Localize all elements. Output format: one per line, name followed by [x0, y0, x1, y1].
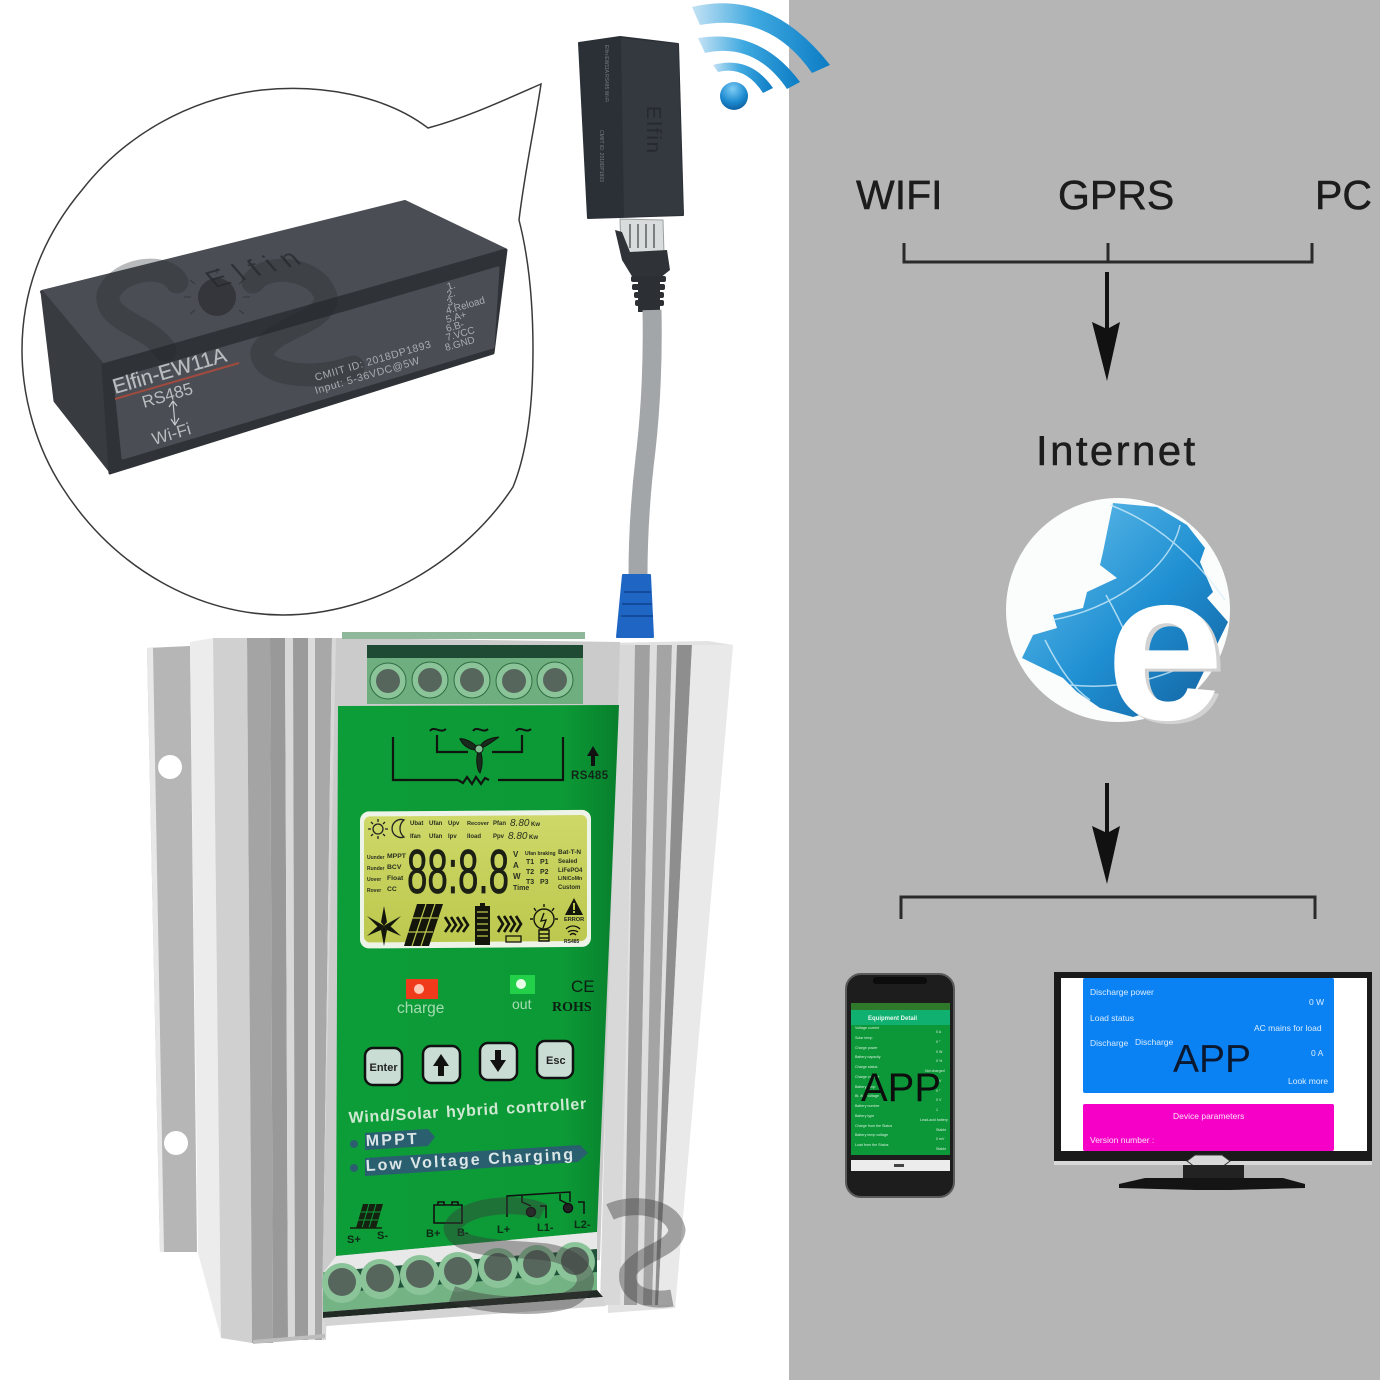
LCD main digits: 88:8.8	[407, 838, 509, 907]
body base edge	[253, 1334, 325, 1344]
terminal base shadow	[323, 1290, 603, 1318]
blue connector	[617, 575, 653, 637]
dongle logo: Elfin	[642, 106, 664, 155]
button down	[480, 1043, 517, 1080]
phone notch	[873, 977, 927, 984]
blue card text: Discharge	[1090, 1038, 1129, 1048]
LCD top labels: Ifan	[410, 834, 421, 840]
LCD top labels: Ufan	[429, 834, 443, 840]
PC label: PC	[1315, 172, 1372, 218]
MPPT tag	[350, 1129, 435, 1150]
Low Voltage Charging tag: Low Voltage Charging	[365, 1146, 576, 1175]
LCD units: W	[513, 872, 521, 881]
LCD wifi icon	[566, 926, 580, 935]
L plus: L+	[497, 1224, 510, 1236]
LCD mode labels: LiFePO4	[558, 868, 583, 874]
B minus: B-	[457, 1227, 469, 1239]
monitor screen	[1061, 978, 1367, 1151]
charge chevrons	[445, 917, 468, 932]
letter e shadow: e	[1110, 530, 1228, 767]
monitor neck	[1183, 1165, 1244, 1178]
module left face	[42, 292, 110, 471]
gray cable	[638, 310, 652, 576]
LCD top labels: Kw	[529, 835, 538, 841]
phone rows: 0 V	[936, 1098, 942, 1102]
LCD top labels: Kw	[531, 822, 540, 828]
LCD left labels: Uunder	[367, 855, 385, 861]
bottom white strip	[323, 1232, 597, 1273]
L1 minus: L1-	[537, 1222, 554, 1234]
B plus: B+	[426, 1228, 440, 1240]
LCD mode labels: T3	[526, 879, 534, 886]
phone rows: 0 V	[936, 1079, 942, 1083]
wiring diagram	[393, 729, 563, 784]
pin list: 6.B-	[445, 319, 465, 335]
terminal lower lip	[323, 1297, 606, 1326]
cable boot	[615, 230, 670, 278]
Elfin-EW11A module	[42, 202, 506, 473]
LCD mode labels: Bat-T-N	[558, 849, 581, 856]
phone rows: Charge voltage	[855, 1075, 879, 1079]
dongle label: Elfin-EW11A RS485 Wi-Fi	[603, 45, 609, 102]
phone	[846, 974, 954, 1197]
LCD mode labels: Custom	[558, 885, 580, 891]
top bracket	[904, 243, 1312, 262]
left channel 2	[293, 638, 308, 1340]
AC wave marks	[430, 729, 531, 731]
double arrow	[169, 401, 179, 425]
LCD RS485 label: RS485	[564, 939, 580, 945]
phone rows: Battery number	[855, 1104, 880, 1108]
phone rows: Lead-acid battery	[920, 1118, 948, 1122]
blue card	[1083, 978, 1334, 1093]
LCD top labels: Recover	[467, 821, 490, 827]
LCD left labels: Rover	[367, 888, 381, 894]
LCD units: V	[513, 850, 519, 859]
right channel 1	[624, 645, 650, 1305]
button Esc	[537, 1041, 573, 1078]
phone rows: 0 °	[936, 1040, 941, 1044]
right panel background	[789, 0, 1380, 1380]
warning icon	[565, 898, 583, 915]
CMIIT ID: CMIIT ID: 2018DP1893	[313, 338, 433, 384]
charge label: charge	[397, 1000, 444, 1017]
phone screen	[851, 1010, 950, 1155]
phone rows: Battery type	[855, 1114, 874, 1118]
LCD mode labels: LiNiCoMn	[558, 876, 582, 882]
phone rows: 1	[936, 1108, 938, 1112]
button up	[423, 1046, 460, 1083]
phone rows: Charge from the Status	[855, 1124, 892, 1128]
sun icon	[368, 819, 388, 839]
wind icon	[367, 906, 401, 946]
pin list: 5.A+	[445, 310, 468, 326]
top terminal block	[367, 645, 583, 704]
watermark on controller	[452, 1206, 677, 1305]
monitor chin line	[1054, 1161, 1372, 1165]
pin list: 8.GND	[444, 335, 476, 354]
LCD mode labels: Ufan braking	[525, 851, 556, 857]
RJ45 plug	[620, 219, 664, 254]
LCD mode labels: P1	[540, 859, 549, 866]
embossed logo: Elfin	[199, 242, 315, 293]
arrow to internet	[1092, 272, 1120, 381]
right rib 3	[652, 645, 677, 1305]
phone bottom bar	[851, 1160, 950, 1171]
phone rows: Load from the Status	[855, 1143, 889, 1147]
LCD mode labels	[525, 849, 583, 891]
button Esc: Esc	[546, 1055, 566, 1067]
right body plate	[600, 641, 733, 1313]
left rib 1	[285, 638, 295, 1340]
LCD left labels: BCV	[387, 864, 402, 871]
S minus: S-	[377, 1230, 388, 1242]
ROHS mark: ROHS	[552, 1000, 592, 1015]
left mounting flange	[147, 646, 197, 1252]
pin list: 2.	[446, 288, 457, 301]
arrow to apps	[1092, 783, 1120, 884]
phone rows: Stable	[936, 1147, 946, 1151]
LCD top labels: Iload	[467, 834, 481, 840]
LCD units: Time	[513, 885, 529, 892]
body white edge	[190, 638, 221, 1338]
LCD mode labels: T1	[526, 859, 534, 866]
RS485 label: RS485	[571, 770, 609, 782]
phone status bar	[851, 1003, 950, 1010]
wind turbine icon	[460, 737, 499, 773]
button Enter: Enter	[370, 1062, 398, 1074]
bottom terminal block	[322, 1242, 606, 1326]
monitor center logo	[1187, 1155, 1230, 1167]
blue connector ribs	[621, 592, 653, 616]
dongle body	[579, 37, 683, 218]
phone rows: Battery temp	[855, 1085, 875, 1089]
phone rows: 0 °	[936, 1089, 941, 1093]
red underline	[115, 363, 239, 399]
RS485 arrow	[587, 746, 599, 766]
LCD mode labels: P2	[540, 869, 549, 876]
speech bubble	[22, 84, 541, 615]
LCD left labels: MPPT	[387, 853, 407, 860]
out label: out	[512, 996, 532, 1012]
pin list	[444, 280, 486, 354]
LCD top labels: 8.80	[510, 818, 530, 829]
RJ45 contacts	[630, 224, 654, 248]
module top face	[42, 202, 505, 363]
solar panel icon	[404, 904, 443, 946]
phone rows: Battery temp voltage	[855, 1133, 888, 1137]
LCD top labels: Ppv	[493, 834, 505, 840]
LCD mode labels: P3	[540, 879, 549, 886]
left rib 3	[322, 638, 338, 1340]
controller title: Wind/Solar hybrid controller	[348, 1096, 587, 1127]
left channel 3	[315, 638, 332, 1340]
magenta card	[1083, 1104, 1334, 1151]
WIFI label: WIFI	[856, 172, 943, 218]
WiFi dongle	[579, 37, 683, 637]
input rating: Input: 5-36VDC@5W	[313, 355, 421, 397]
phone rows: Voltage current	[855, 1026, 879, 1030]
magenta card title: Device parameters	[1173, 1111, 1244, 1121]
charge LED	[406, 979, 438, 999]
button Enter	[365, 1048, 402, 1085]
phone rows: 0 mV	[936, 1137, 945, 1141]
left background	[0, 0, 789, 1380]
S plus: S+	[347, 1234, 361, 1246]
battery terminal icon	[434, 1202, 462, 1223]
phone rows: Stable	[936, 1128, 946, 1132]
dongle right face	[621, 38, 683, 217]
monitor APP label: APP	[1173, 1038, 1251, 1081]
LCD top labels: Ufan	[429, 821, 443, 827]
pin list: 4.Reload	[445, 295, 486, 317]
letter e: e	[1106, 527, 1224, 764]
LCD display	[360, 810, 591, 948]
load wiring icon	[507, 1192, 584, 1218]
MPPT tag: MPPT	[365, 1131, 419, 1150]
LCD units: A	[513, 861, 519, 870]
pin list: 1.	[446, 280, 457, 293]
LCD left labels: Float	[387, 875, 404, 882]
phone body	[846, 974, 954, 1197]
phone rows: 0 A	[936, 1030, 942, 1034]
dongle label 2: CMIIT ID: 2018DP1893	[598, 130, 604, 182]
left rib 2	[308, 638, 315, 1340]
Internet label: Internet	[1036, 427, 1198, 474]
icon: wifi signal	[692, 3, 830, 110]
LCD top labels: Upv	[448, 821, 460, 827]
top terminal strip	[342, 632, 585, 639]
phone bottom bar dots	[894, 1164, 904, 1167]
LCD left labels: Runder	[367, 866, 385, 872]
blue card text: Discharge	[1135, 1037, 1174, 1047]
watermark sun	[184, 268, 250, 316]
flange hole bottom	[164, 1131, 188, 1155]
model name: Elfin-EW11A	[110, 344, 229, 399]
monitor frame	[1054, 972, 1372, 1165]
phone rows	[855, 1026, 948, 1151]
blue card text: Load status	[1090, 1013, 1134, 1023]
flange light edge	[147, 648, 164, 1252]
bottom bracket	[901, 897, 1315, 919]
GPRS label: GPRS	[1058, 172, 1174, 218]
phone APP label: APP	[861, 1066, 941, 1110]
pin list: 3.	[446, 296, 457, 309]
solar terminal icon	[350, 1204, 383, 1228]
LCD top labels: 8.80	[508, 831, 528, 842]
L2 minus: L2-	[574, 1219, 591, 1231]
LCD mode labels: T2	[526, 869, 534, 876]
monitor	[1054, 972, 1372, 1190]
LCD mode labels: Sealed	[558, 859, 578, 865]
out LED	[510, 975, 535, 994]
hybrid controller	[147, 632, 733, 1344]
LCD units	[513, 850, 529, 892]
watermark on module	[108, 270, 353, 375]
phone header	[851, 1010, 950, 1025]
blue card text	[1090, 987, 1328, 1086]
blue card text: AC mains for load	[1254, 1023, 1322, 1033]
right rib 1	[600, 645, 635, 1305]
LCD top labels	[410, 818, 540, 842]
LCD top labels: Ubat	[410, 821, 423, 827]
LCD top labels: Ipv	[448, 834, 457, 840]
resistor icon	[506, 936, 521, 942]
phone header title: Equipment Detail	[868, 1016, 917, 1022]
battery icon	[475, 903, 490, 945]
icon: internet globe	[1006, 498, 1230, 767]
ERROR label: ERROR	[564, 917, 584, 923]
right band	[658, 645, 733, 1305]
magenta card version: Version number :	[1090, 1135, 1154, 1145]
center silver plate	[322, 638, 620, 1296]
monitor base	[1119, 1178, 1305, 1190]
left body band 2	[247, 638, 273, 1343]
RS485 label: RS485	[140, 379, 195, 412]
phone rows: Charge status	[855, 1065, 878, 1069]
LCD top labels: Pfan	[493, 821, 506, 827]
flange hole top	[158, 755, 182, 779]
blue card text: Discharge power	[1090, 987, 1154, 997]
phone rows: Battery capacity	[855, 1055, 881, 1059]
module front face	[103, 250, 506, 473]
phone rows: Solar temp	[855, 1036, 872, 1040]
globe ocean	[1022, 503, 1228, 717]
green front panel	[336, 705, 619, 1256]
left body band 1	[213, 638, 252, 1343]
phone rows: Not charged	[925, 1069, 945, 1073]
phone rows: Bt. Avg voltage	[855, 1094, 879, 1098]
phone rows: 0 %	[936, 1059, 943, 1063]
moon icon	[392, 820, 404, 838]
module label plate	[115, 268, 498, 458]
LCD left labels: Uover	[367, 877, 381, 883]
right channel 3	[655, 645, 692, 1305]
CE mark: CE	[571, 977, 595, 996]
blue card text: 0 W	[1309, 997, 1324, 1007]
LCD left labels	[367, 853, 407, 894]
globe grid	[1045, 505, 1225, 700]
LCD left labels: CC	[387, 886, 397, 893]
boot ribs	[631, 276, 666, 312]
phone rows: Charge power	[855, 1046, 878, 1050]
discharge chevrons	[498, 916, 521, 932]
Wi-Fi label: Wi-Fi	[150, 419, 193, 449]
left channel 1	[270, 638, 288, 1340]
pin list: 7.VCC	[445, 325, 476, 344]
blue card text: 0 A	[1311, 1048, 1324, 1058]
blue card text: Look more	[1288, 1076, 1328, 1086]
bulb icon	[530, 904, 558, 941]
right channel 2	[643, 645, 672, 1305]
right rib 2	[637, 645, 657, 1305]
phone rows: 0 W	[936, 1050, 943, 1054]
